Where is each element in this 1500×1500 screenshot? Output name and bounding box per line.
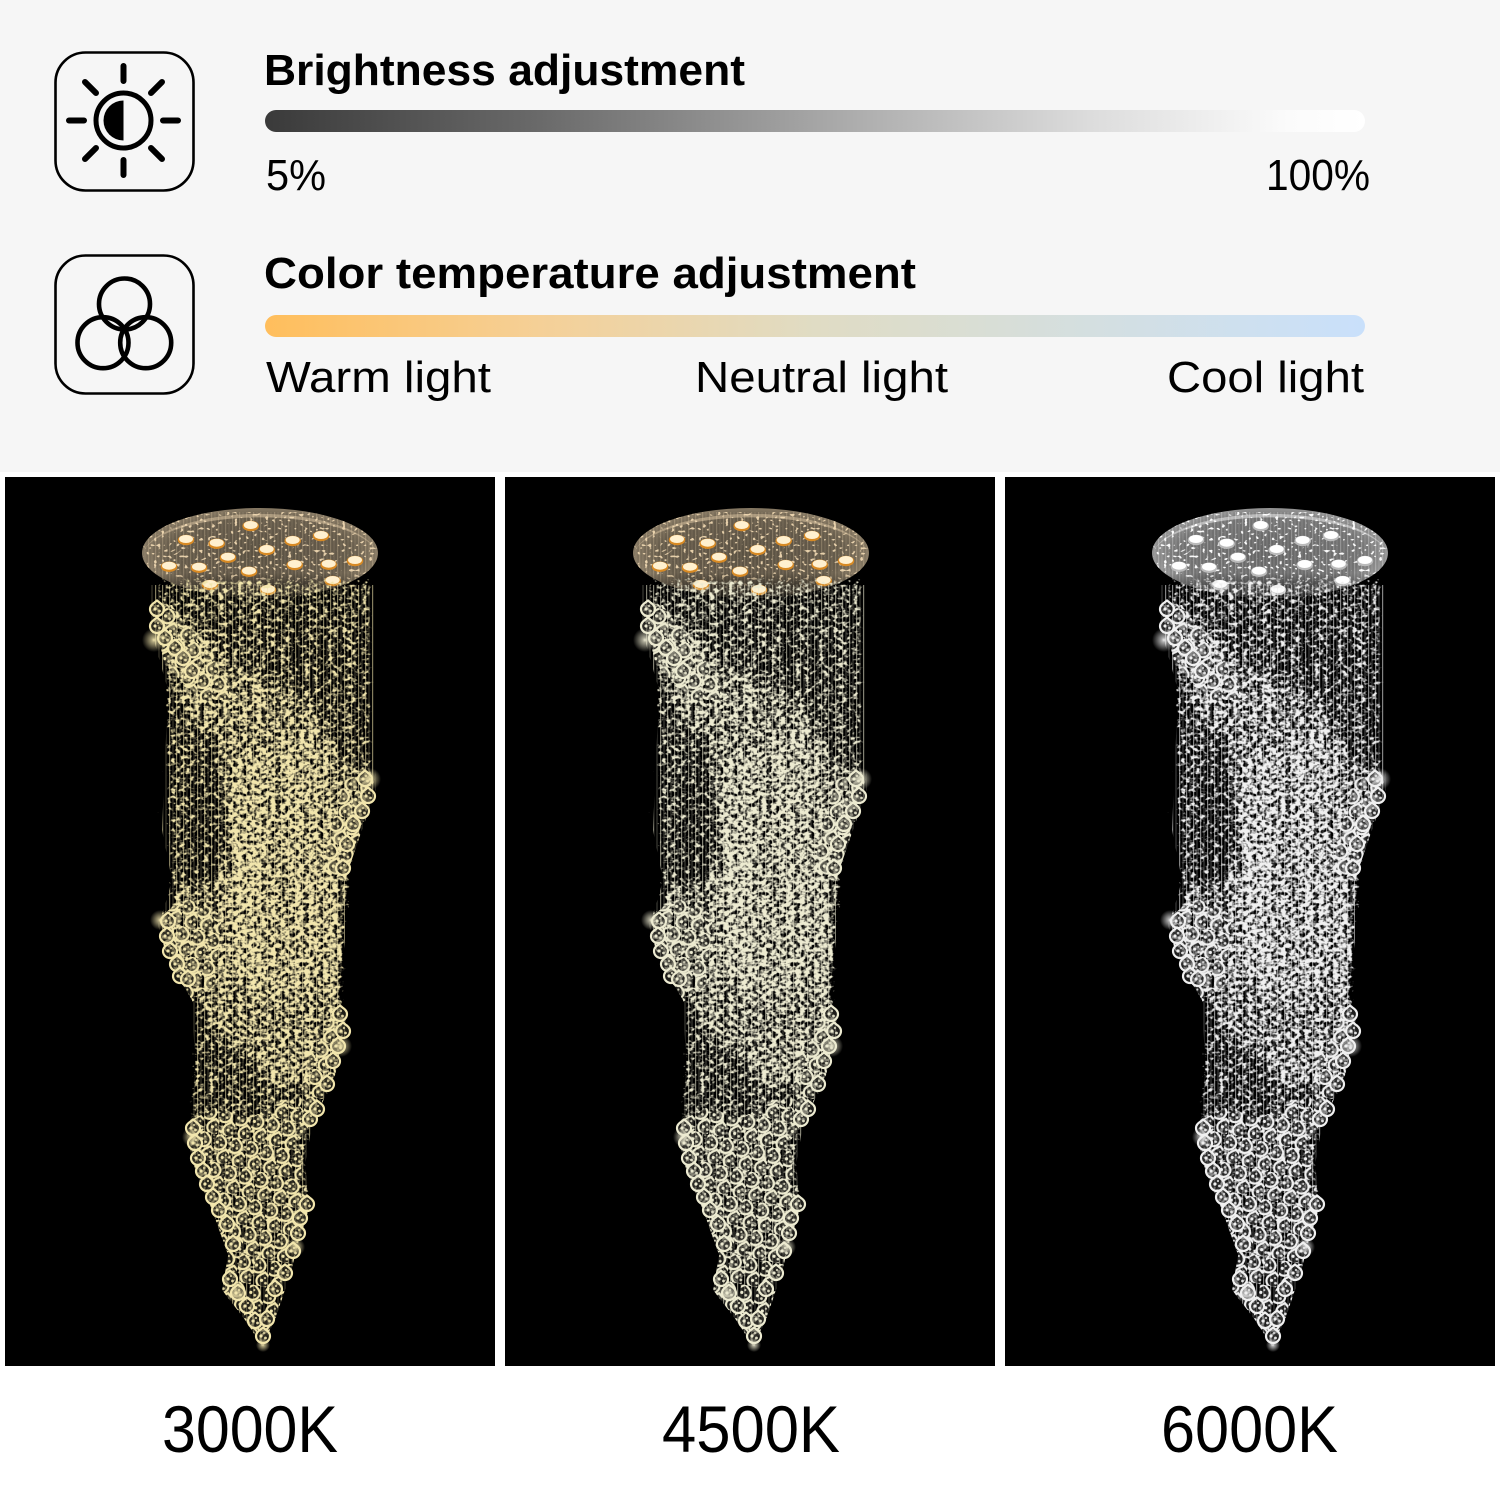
panel: 4500K chandelier [505, 477, 995, 1366]
label: 3000K: 3000K [162, 1392, 338, 1466]
top background [0, 0, 1500, 472]
icon: three overlapping circles [56, 256, 194, 394]
panel: 3000K chandelier [5, 477, 495, 1366]
label: neutral light: Neutral light [695, 353, 948, 402]
color temperature gradient bar [265, 315, 1365, 337]
heading: brightness adjustment: Brightness adjustment [264, 46, 745, 95]
label: 4500K: 4500K [662, 1392, 840, 1466]
label: 5%: 5% [266, 151, 326, 200]
label: cool light: Cool light [1167, 353, 1364, 402]
label: 6000K: 6000K [1161, 1392, 1338, 1466]
brightness gradient bar [265, 110, 1365, 132]
icon: brightness sun [56, 52, 194, 190]
label: 100%: 100% [1266, 151, 1370, 200]
heading: color temperature adjustment: Color temperature adjustment [264, 249, 916, 298]
panel: 6000K chandelier [1005, 477, 1495, 1366]
label: warm light: Warm light [266, 353, 491, 402]
